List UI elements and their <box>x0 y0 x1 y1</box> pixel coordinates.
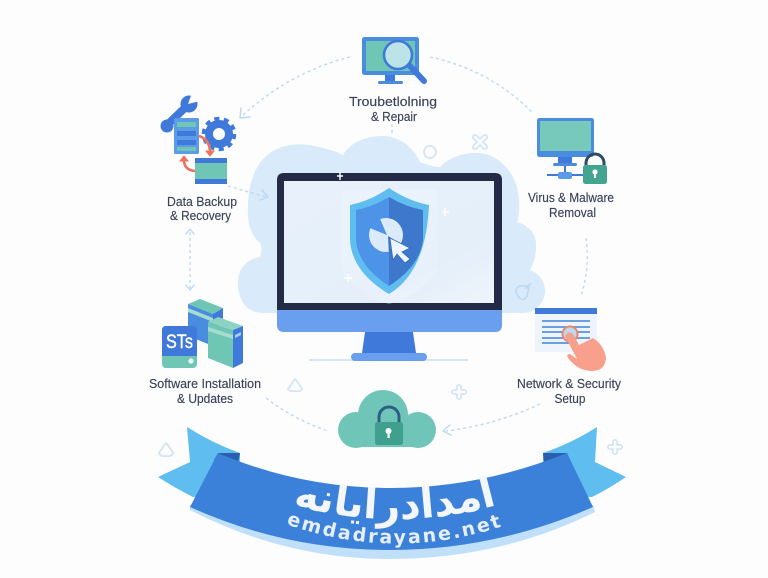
label: Network & Security <box>517 377 622 391</box>
icon: software box and servers: STs <box>166 332 193 353</box>
icon: cloud with padlock <box>338 390 436 448</box>
service: troubleshooting and repair <box>349 37 437 124</box>
decorative outlines <box>159 137 620 456</box>
persian brand text: امدادرایانه <box>296 476 494 529</box>
service: software installation and updates: & Updates <box>177 392 233 406</box>
monitor chin <box>277 310 502 332</box>
label: Virus & Malware <box>528 191 614 205</box>
service: data backup and recovery: & Recovery <box>170 209 232 223</box>
service: network and security setup: Setup <box>554 392 586 406</box>
website text: emdadrayane.net <box>288 515 501 548</box>
label: Data Backup <box>167 195 237 209</box>
label: Troubetlolning <box>349 95 437 109</box>
service: virus and malware removal: Removal <box>549 206 596 220</box>
monitor body <box>277 173 502 310</box>
icon: wrench, server, gear <box>160 93 234 184</box>
ribbon shadow <box>190 505 595 559</box>
service: network and security setup <box>517 308 622 406</box>
screen sparkles <box>337 172 449 282</box>
background cloud <box>238 136 545 313</box>
monitor screen <box>284 181 494 303</box>
icon: monitor with padlock <box>537 118 607 184</box>
monitor shadow <box>309 359 468 361</box>
cursor arrow <box>390 238 410 263</box>
label: Software Installation <box>149 377 261 391</box>
dashed cycle connectors <box>186 57 587 435</box>
ribbon folds <box>214 453 240 463</box>
service: software installation and updates <box>149 299 261 406</box>
wrench symbol <box>365 214 404 256</box>
monitor foot <box>351 353 427 361</box>
icon: settings panel with hand <box>535 308 606 371</box>
shield <box>350 188 429 294</box>
banner ribbon <box>158 427 626 559</box>
central monitor <box>277 172 502 361</box>
monitor stand <box>362 332 416 353</box>
shield glow <box>341 190 437 304</box>
service: troubleshooting and repair: & Repair <box>371 110 417 124</box>
icon: monitor with magnifier <box>362 37 424 84</box>
service: virus and malware removal <box>528 118 614 220</box>
ribbon tails <box>158 427 240 497</box>
ribbon band <box>190 453 593 550</box>
service: data backup and recovery <box>160 93 237 223</box>
